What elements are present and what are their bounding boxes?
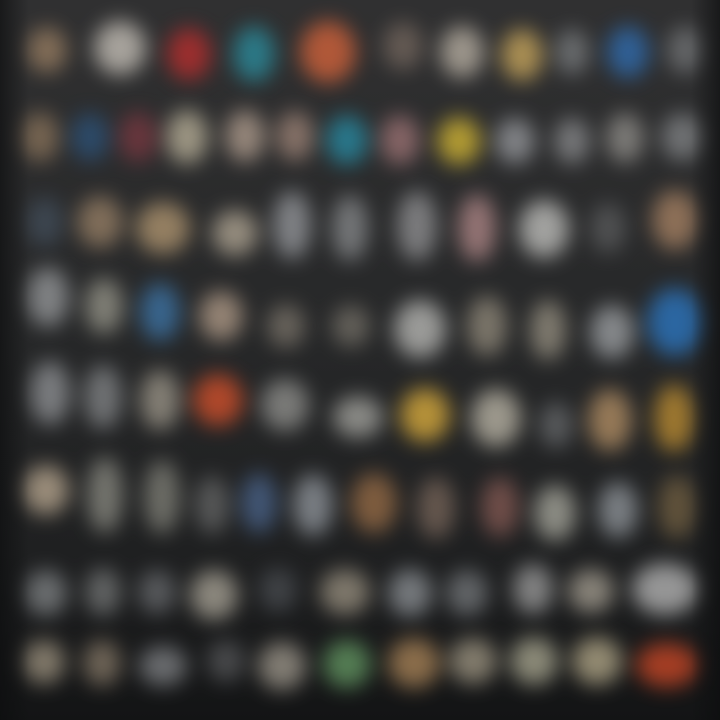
row 2 of icons — [21, 110, 703, 165]
row 7 of icons — [25, 563, 698, 620]
row 4 of icons — [27, 267, 703, 360]
row 6 of icons — [23, 457, 696, 541]
row 8 of icons — [23, 637, 698, 690]
row 1 of icons — [27, 21, 703, 83]
row 3 of icons — [27, 190, 698, 262]
row 5 of icons — [30, 361, 694, 452]
